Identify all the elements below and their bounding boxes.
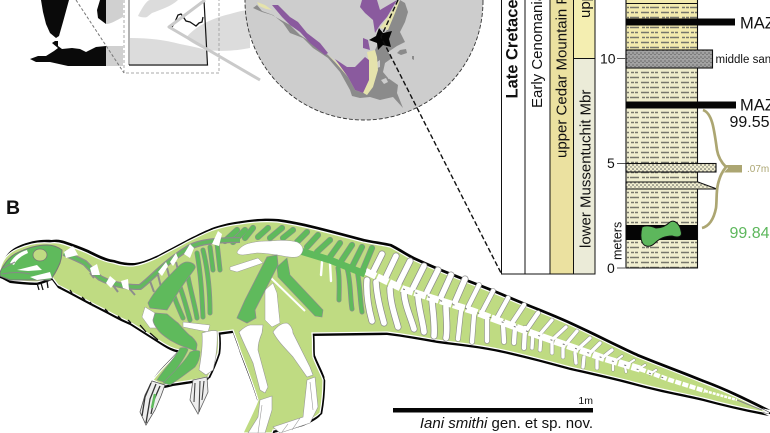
body: green silhouette bbox=[0, 222, 769, 433]
skeleton: far femur bbox=[265, 283, 280, 327]
skeleton: caudal neural spines and chevrons bbox=[365, 254, 762, 410]
skeleton: dorsal ribs grey edge bbox=[173, 243, 362, 320]
section: fossil horizon bbox=[626, 225, 698, 240]
skeleton: far tibia bbox=[273, 323, 313, 377]
section: sandstone lens upper bbox=[626, 164, 716, 172]
skeleton: white ribs bbox=[321, 262, 331, 281]
panel: skeletal reconstruction bbox=[0, 219, 770, 433]
label: .07m: .07m bbox=[747, 164, 769, 175]
skeleton: far forelimb bbox=[199, 331, 217, 375]
map: star locality marker bbox=[369, 28, 392, 50]
brace: tan age bracket bbox=[702, 110, 726, 228]
caption: species name: Iani smithi gen. et sp. nov. bbox=[420, 415, 593, 432]
map: dashed connector to section bbox=[381, 0, 501, 273]
skeleton: teeth and throat fringe bbox=[37, 281, 158, 340]
map: pale yellow formation bbox=[257, 0, 400, 95]
label: 99.84 date: 99.84 bbox=[730, 225, 770, 242]
section: sandstone wedge lower bbox=[626, 182, 717, 189]
label: 1m: 1m bbox=[578, 395, 593, 407]
map: magnified circle bbox=[245, 0, 483, 120]
skeleton: near hand bbox=[140, 381, 165, 425]
map: grey callout wedge bbox=[169, 0, 260, 80]
map: light holes in outcrop bbox=[377, 60, 392, 84]
map: purple formation bbox=[272, 0, 397, 93]
skeleton: neck and anterior vertebrae bbox=[64, 231, 240, 295]
skeleton: ilium bbox=[237, 240, 303, 257]
scale bar bbox=[393, 408, 593, 412]
skeleton: far hand bbox=[190, 377, 208, 414]
axis: 5 bbox=[607, 155, 626, 171]
skeleton: far foot bbox=[273, 377, 318, 433]
axis: 10: 10 bbox=[600, 50, 616, 66]
section: upper ash bed MAZ bbox=[626, 18, 735, 26]
section: lower ash bed MAZ bbox=[626, 102, 736, 108]
map: dashed inset outline bbox=[124, 0, 219, 73]
skeleton: caudal centra bbox=[365, 271, 762, 410]
skeleton: ischium bbox=[277, 258, 323, 317]
label: meters: meters bbox=[610, 222, 624, 260]
icon: green bone bbox=[641, 221, 681, 246]
map: grey extension bbox=[106, 0, 123, 66]
heading: panel B: B bbox=[6, 197, 20, 219]
skeleton: skull bbox=[0, 245, 62, 280]
map: dashed connector bbox=[76, 0, 124, 73]
panel: stratigraphic section bbox=[600, 0, 770, 276]
map: inset frame solid edge bbox=[129, 0, 208, 65]
skeleton: sternal plates bbox=[183, 322, 210, 332]
skeleton: dorsal spines bbox=[225, 228, 372, 272]
map: black landmass bbox=[30, 0, 106, 66]
skeleton: pubic rod bbox=[270, 277, 305, 311]
label: 99.55 date: 99.55 bbox=[730, 114, 770, 131]
axis: 5: 5 bbox=[607, 155, 615, 171]
skeleton: forearm bbox=[157, 348, 200, 385]
map: grey outcrop bbox=[253, 0, 408, 108]
skeleton: humerus bbox=[153, 313, 197, 351]
map: inset background shapes bbox=[130, 0, 250, 64]
label: lower Mussentuchit Mbr: lower Mussentuchit Mbr bbox=[578, 90, 594, 248]
skeleton: near femur bbox=[237, 255, 278, 323]
map: inset frame bbox=[128, 0, 130, 65]
column lines bbox=[502, 0, 595, 274]
skeleton: coracoid bbox=[142, 307, 157, 328]
skeleton: dorsal centra bbox=[297, 250, 365, 274]
column fills bbox=[550, 0, 595, 274]
axis: 10 bbox=[600, 50, 626, 66]
section: middle sandstone bed bbox=[626, 50, 712, 68]
axis: 0 bbox=[607, 260, 626, 276]
skeleton: near foot bbox=[248, 396, 272, 433]
axis: 0: 0 bbox=[607, 260, 615, 276]
section: outline bbox=[626, 0, 698, 268]
skeleton: dorsal spines grey edge bbox=[225, 228, 372, 272]
map: state boundary line bbox=[172, 14, 203, 27]
brace tip bbox=[724, 165, 742, 172]
skeleton: dorsal ribs bbox=[173, 243, 362, 320]
panel: location map bbox=[30, 0, 501, 273]
skeleton: near tibia bbox=[239, 325, 268, 393]
panel: chronostratigraphy columns bbox=[502, 0, 595, 274]
section: background beds bbox=[626, 0, 698, 268]
skeleton: prepubis bbox=[230, 258, 263, 272]
body: black outline bbox=[0, 219, 770, 433]
skeleton: scapula bbox=[148, 262, 195, 310]
